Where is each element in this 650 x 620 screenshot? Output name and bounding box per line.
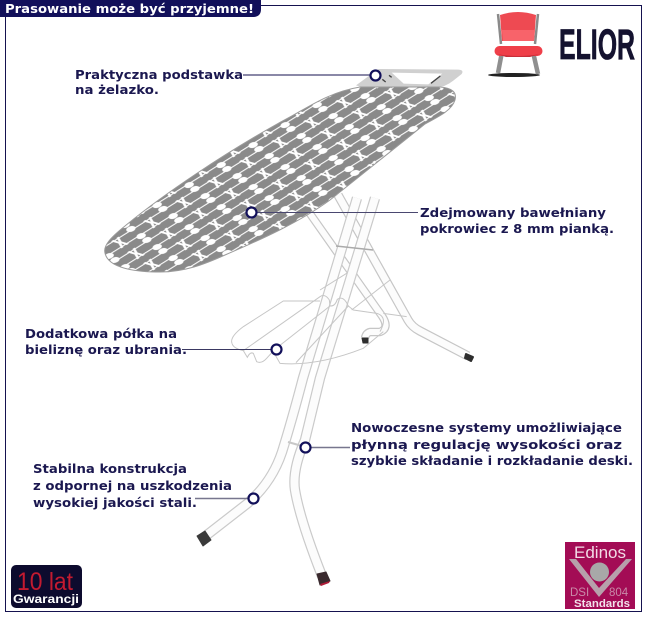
- badge: Edinos standards: DSI: [570, 587, 589, 599]
- badge: Edinos standards: Edinos: [574, 543, 626, 562]
- callout: height adjustment: Nowoczesne systemy umożliwiające: [351, 420, 622, 435]
- badge: 10 year warranty: 10 lat: [17, 568, 73, 596]
- callout: extra shelf: bieliznę oraz ubrania.: [25, 342, 187, 357]
- callout: removable cover: Zdejmowany bawełniany: [420, 205, 606, 220]
- brand logo: chair icon: [488, 12, 542, 77]
- callout: iron rest: na żelazko.: [75, 82, 159, 97]
- callout: extra shelf: [25, 326, 282, 357]
- ironing board with patterned cover: [105, 87, 455, 272]
- callout: height adjustment: szybkie składanie i rozkładanie deski.: [351, 453, 633, 468]
- badge: Edinos standards: Standards: [574, 598, 630, 610]
- callout: extra shelf: Dodatkowa półka na: [25, 326, 177, 341]
- badge: 10 year warranty: Gwarancji: [13, 594, 79, 606]
- badge: Edinos standards: 804: [609, 587, 629, 599]
- iron rest: [356, 69, 462, 88]
- callout: height adjustment: płynną regulację wysokości oraz: [351, 437, 622, 452]
- badge: 10 year warranty: [11, 565, 82, 608]
- title banner: Prasowanie może być przyjemne!: [5, 1, 254, 16]
- front left leg with foot: [197, 198, 357, 546]
- leg brace: [288, 442, 302, 446]
- callout: stable construction: Stabilna konstrukcja: [33, 461, 187, 476]
- badge: Edinos standards: [565, 542, 635, 610]
- laundry shelf: [232, 273, 407, 364]
- callout: stable construction: wysokiej jakości stali.: [33, 495, 197, 510]
- callout: stable construction: [33, 461, 258, 510]
- callout: removable cover: [246, 205, 614, 236]
- rear hooked leg with foot: [306, 208, 386, 343]
- callout: iron rest: Praktyczna podstawka: [75, 67, 243, 82]
- front right leg with foot: [294, 198, 375, 586]
- ironing board legs: [197, 195, 473, 586]
- callout: stable construction: z odpornej na uszkodzenia: [33, 478, 232, 493]
- callout: height adjustment: [300, 420, 633, 468]
- callout: iron rest: [75, 67, 380, 97]
- crossbar: [336, 246, 373, 250]
- callout: removable cover: pokrowiec z 8 mm pianką.: [420, 221, 614, 236]
- back leg with foot: [338, 195, 473, 361]
